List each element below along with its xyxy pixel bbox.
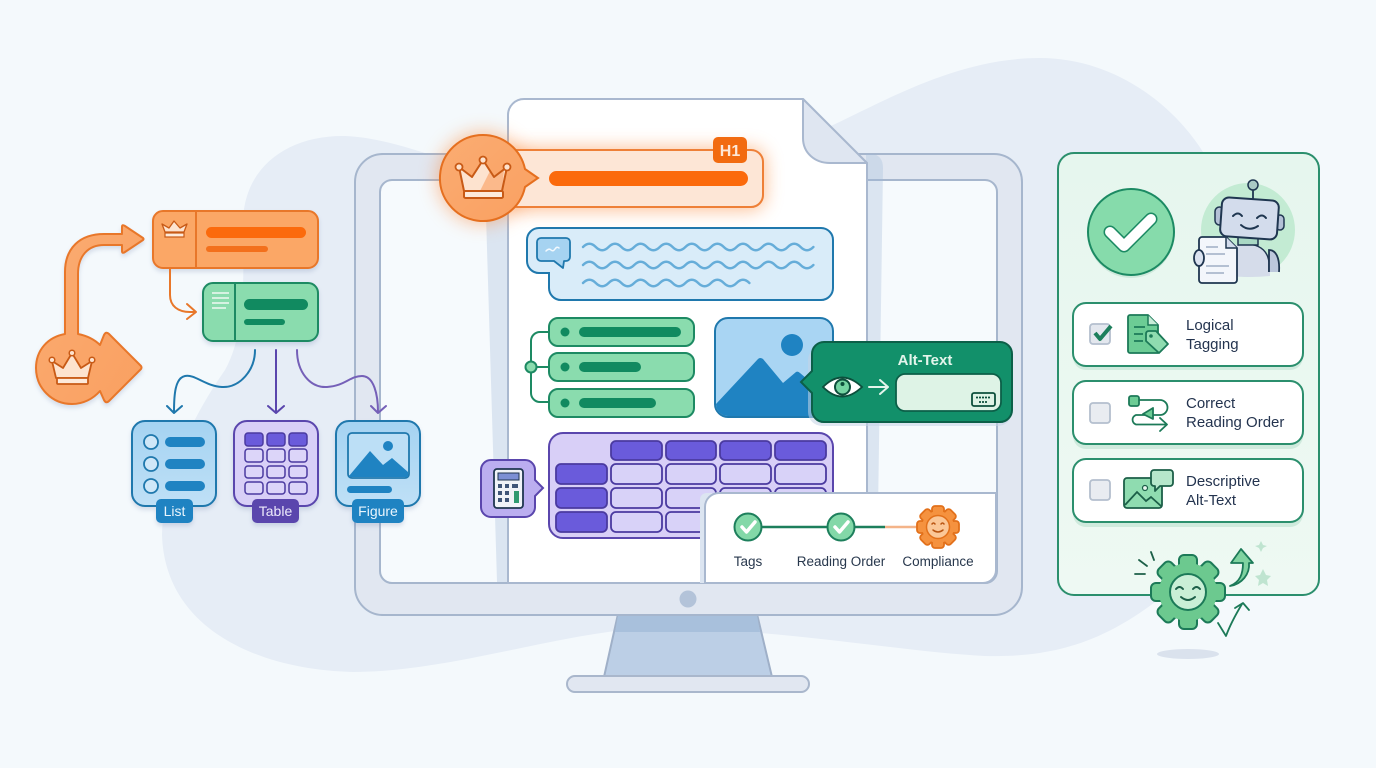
checklist row: logical tagging: Logical (1186, 317, 1234, 334)
alt-text label: Alt-Text (898, 352, 952, 369)
crown badge (440, 135, 538, 221)
power button (680, 590, 696, 608)
calculator badge (481, 460, 543, 517)
alt-text input (896, 374, 1001, 411)
arrow to list (167, 350, 255, 413)
small crown (162, 221, 187, 237)
eye icon (823, 378, 862, 396)
step: reading order (797, 514, 886, 569)
left structure tree (36, 211, 420, 523)
step: compliance gear (902, 506, 974, 569)
table block (549, 433, 833, 538)
paragraph block (527, 228, 833, 300)
monitor stand (567, 614, 809, 692)
gear shadow (1157, 649, 1219, 659)
reading order icon (1129, 396, 1168, 431)
list block (526, 318, 694, 417)
gear burst lines (1135, 552, 1154, 574)
monitor (355, 154, 1022, 692)
picture speech icon (1124, 470, 1173, 508)
figure card (336, 421, 420, 523)
H1 badge (713, 137, 747, 163)
gear body (1151, 555, 1225, 629)
robot icon (1194, 180, 1295, 283)
list row 2 (549, 353, 694, 381)
robot's document (1194, 237, 1237, 283)
document shadow (486, 154, 883, 582)
list label: List (164, 503, 185, 519)
checklist row: logical tagging (1073, 303, 1303, 370)
step: tags: Tags (734, 554, 763, 569)
table card (234, 421, 318, 523)
heading bar (505, 150, 763, 207)
checklist row: descriptive alt-text (1073, 459, 1303, 527)
figure label: Figure (358, 503, 398, 519)
list row 1 (549, 318, 694, 346)
keyboard icon (972, 393, 995, 406)
speech icon (537, 238, 570, 268)
table label: Table (259, 503, 292, 519)
monitor screen (380, 180, 997, 583)
checklist row: descriptive alt-text: Alt-Text (1186, 492, 1237, 509)
arrow to figure (297, 350, 386, 413)
monitor bezel (355, 154, 1022, 615)
crown icon (49, 350, 95, 384)
list card (132, 421, 216, 523)
arrow (869, 380, 888, 394)
progress line (761, 526, 885, 528)
H1 heading block (437, 132, 765, 224)
paragraph node (203, 283, 318, 341)
step: compliance gear: Compliance (902, 554, 974, 569)
checklist row: correct reading order: Correct (1186, 395, 1236, 412)
wavy text lines (583, 244, 813, 286)
growth arrow (1230, 549, 1253, 586)
page fold (803, 99, 867, 163)
step: reading order: Reading Order (797, 554, 886, 569)
checklist row: descriptive alt-text: Descriptive (1186, 473, 1260, 490)
thin orange arrow (170, 268, 196, 319)
table body cells (611, 464, 826, 532)
table header cells (556, 441, 826, 532)
image block (715, 318, 833, 417)
document page (508, 99, 867, 583)
checklist row: correct reading order: Reading Order (1186, 414, 1284, 431)
checklist row: correct reading order (1073, 381, 1303, 449)
step: tags (734, 514, 763, 569)
star (1255, 569, 1271, 586)
big check circle (1088, 189, 1174, 278)
progress panel (700, 493, 996, 583)
alt-text callout (801, 342, 1012, 426)
tag document icon (1128, 315, 1168, 353)
H1 node (153, 211, 318, 268)
big crown arrow (36, 225, 144, 404)
arrow to table (268, 350, 284, 413)
checklist row: logical tagging: Tagging (1186, 336, 1239, 353)
list row 3 (549, 389, 694, 417)
H1 badge: H1 (720, 143, 740, 160)
background blob (162, 58, 1258, 672)
checklist panel (1058, 153, 1319, 595)
list connector (526, 332, 549, 402)
sparkle (1255, 541, 1267, 552)
happy gear (1135, 541, 1271, 659)
small arrow (1218, 603, 1249, 636)
